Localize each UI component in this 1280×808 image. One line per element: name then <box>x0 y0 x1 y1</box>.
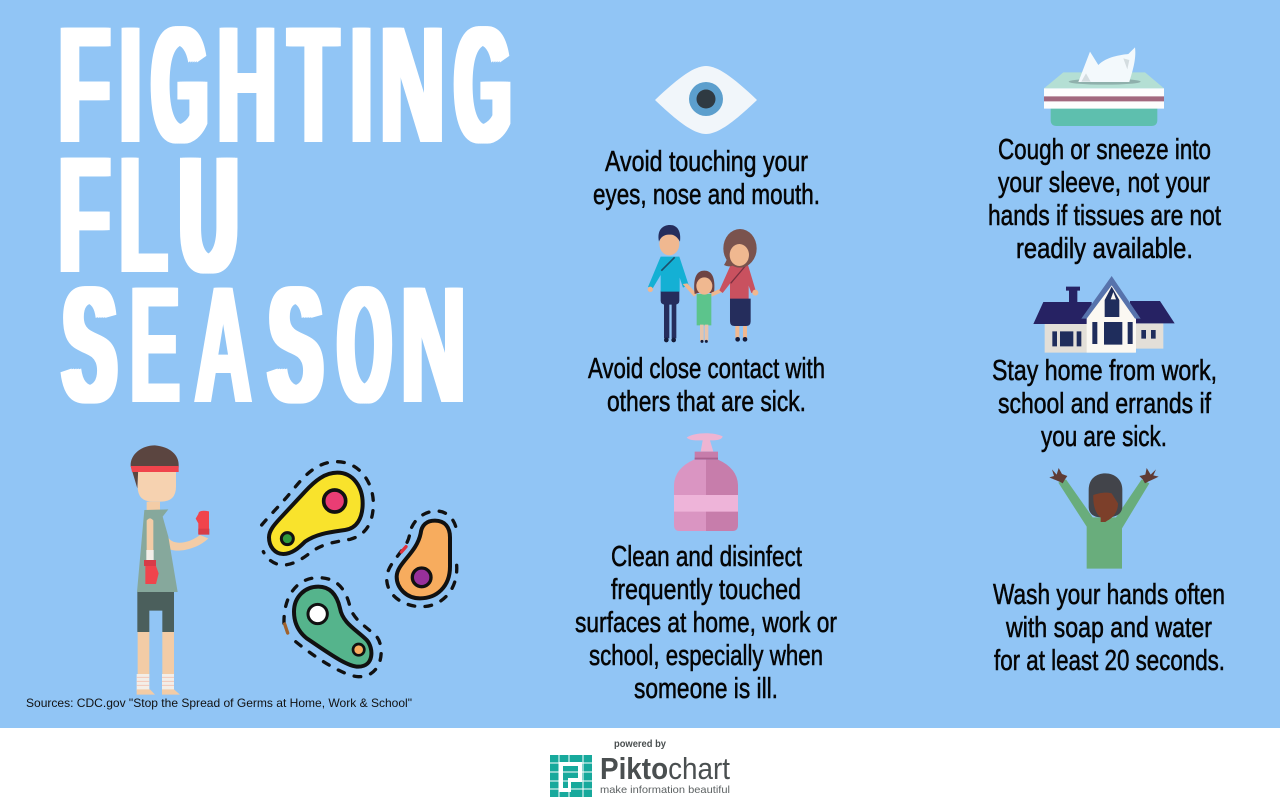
illustration: boxer man <box>131 445 209 695</box>
icon: Piktochart mosaic <box>550 755 592 797</box>
tip: wash hands: with soap and water <box>1005 612 1212 644</box>
title: L <box>119 122 168 308</box>
tip: cough or sneeze: hands if tissues are not <box>988 200 1221 232</box>
icon: eye <box>655 66 757 134</box>
icon: family <box>648 225 758 343</box>
title: S <box>269 252 322 438</box>
icon: person with raised hands <box>1049 468 1159 569</box>
tip: cough or sneeze: your sleeve, not your <box>998 167 1210 199</box>
title: E <box>130 252 179 438</box>
tip: stay home <box>992 355 1217 453</box>
tip: avoid contact <box>588 353 825 418</box>
tip: avoid touching: Avoid touching your <box>605 146 808 178</box>
tip: clean and disinfect <box>575 541 837 705</box>
footer logo: powered by Piktochart: make information beautiful <box>600 784 730 796</box>
tip: cough or sneeze <box>988 134 1221 265</box>
title: O <box>338 252 391 438</box>
footer logo: powered by Piktochart <box>550 739 730 797</box>
tip: avoid contact: others that are sick. <box>607 386 806 418</box>
icon: house <box>1033 276 1175 353</box>
tip: stay home: you are sick. <box>1041 421 1167 453</box>
tip: cough or sneeze: Cough or sneeze into <box>998 134 1211 166</box>
footer logo: powered by Piktochart: Piktochart <box>600 751 730 786</box>
illustration: germs <box>262 462 457 677</box>
footer band <box>0 728 1280 808</box>
title: F <box>58 122 110 308</box>
icon: soap bottle <box>674 433 738 531</box>
title: N <box>401 252 465 438</box>
germ: green <box>284 578 381 677</box>
tip: cough or sneeze: readily available. <box>1016 233 1193 265</box>
title: A <box>195 252 251 438</box>
tip: clean and disinfect: school, especially when <box>589 640 823 672</box>
title: S <box>63 252 116 438</box>
title: U <box>180 122 238 308</box>
tip: avoid contact: Avoid close contact with <box>588 353 825 385</box>
tip: avoid touching <box>593 146 820 211</box>
tip: clean and disinfect: Clean and disinfect <box>611 541 802 573</box>
germ: orange <box>387 511 457 607</box>
tip: clean and disinfect: frequently touched <box>611 574 801 606</box>
icon: tissue box <box>1044 47 1164 126</box>
germ: yellow <box>262 462 373 565</box>
tip: avoid touching: eyes, nose and mouth. <box>593 179 820 211</box>
tip: wash hands <box>993 579 1225 677</box>
tip: clean and disinfect: someone is ill. <box>634 673 778 705</box>
tip: stay home: school and errands if <box>998 388 1212 420</box>
footer logo: powered by Piktochart: powered by <box>614 739 666 750</box>
tip: stay home: Stay home from work, <box>992 355 1217 387</box>
sources note: Sources: CDC.gov "Stop the Spread of Germs at Home, Work & School" <box>26 696 412 710</box>
tip: clean and disinfect: surfaces at home, work or <box>575 607 837 639</box>
title <box>58 0 511 438</box>
